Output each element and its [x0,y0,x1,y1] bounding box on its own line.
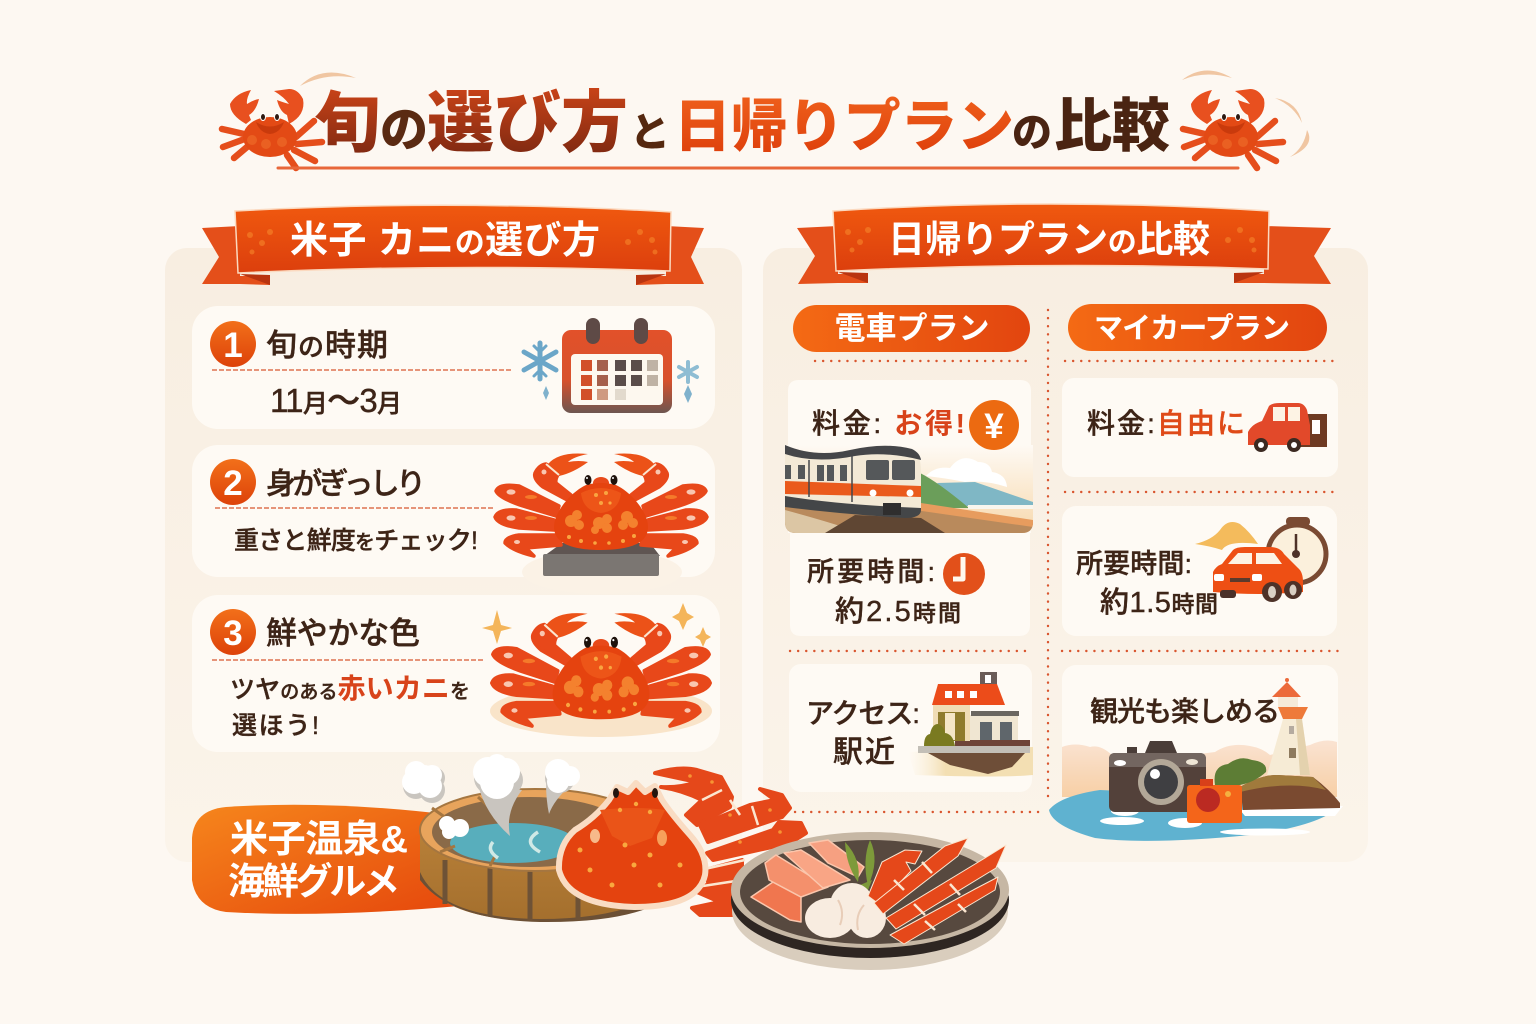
icon: snowflake right [679,362,697,382]
title underline [278,166,1238,170]
title block [222,69,1309,168]
title text: の [1012,100,1052,158]
icon: title crab right [1183,89,1283,168]
icon: crab on scale [495,453,707,556]
heading: vivid colour: 鮮やかな色 [266,616,420,651]
crab body [559,783,705,907]
pill: car plan [1068,304,1327,351]
leaf [845,840,875,905]
red crab text: ツヤのある赤いカニを [230,673,470,704]
sightseeing card [1049,665,1343,841]
number 1 [210,321,256,367]
card 3: colour [192,595,720,752]
title text: 選び方 [427,69,628,166]
title text: と [630,100,670,158]
cloud [1195,522,1258,550]
crab legs on plate [868,838,1006,944]
icon: yen: ¥ [984,407,1004,446]
icon: large crab [559,769,806,915]
pill: car plan: マイカープラン [1094,312,1290,345]
icon: orange car [1213,547,1303,602]
icon: title crab left [222,89,322,168]
time value car: 約1.5時間 [1100,586,1218,619]
card 1: season [192,306,715,429]
time label car: 所要時間: [1076,549,1192,579]
card 2: meat [192,445,715,594]
heading: season: 旬の時期 [266,328,388,363]
crab legs [655,769,806,915]
left ribbon heading [202,205,704,285]
icon: scale [522,543,682,594]
left panel [165,248,742,862]
icon: station house [908,672,1033,776]
number 3 [210,609,256,655]
train [785,445,921,518]
bottom banner [192,805,470,914]
column divider [1047,310,1049,802]
icon: sea [1049,790,1340,841]
number 2: 2 [223,464,243,503]
car fee card [1062,378,1338,477]
access label: アクセス: [806,698,920,729]
scallops [805,883,886,938]
icon: seafood plate [731,832,1009,970]
icon: vivid crab [492,613,710,726]
access value: 駅近 [833,736,895,769]
pill: train plan: 電車プラン [834,311,990,346]
icon: calendar [562,318,672,413]
title text: 旬 [314,70,380,166]
fee text car: 料金:自由に [1087,408,1245,439]
icon: small red camera [1187,779,1242,823]
number 3: 3 [223,614,243,653]
title text: の [380,90,428,160]
icon: stopwatch [1268,517,1326,583]
title text: 日帰りプラン [674,81,1014,163]
platter [490,685,712,737]
bottom banner: 海鮮グルメ [228,861,400,902]
decorative swirls [300,70,1309,157]
car time card [1062,506,1337,636]
right ribbon text: 日帰りプランの比較 [888,219,1210,260]
icon: snowflake left [524,343,556,379]
icon: yen [969,400,1019,450]
crab meat [751,840,864,922]
choose text: 選ほう! [232,712,319,740]
access card [789,664,1033,792]
time label train: 所要時間: [807,557,935,587]
icon: camera [1109,741,1206,812]
icon: lighthouse [1267,678,1310,775]
sunset hills [1062,741,1337,797]
heading: full meat: 身がぎっしり [266,468,426,501]
right panel [763,248,1368,862]
scene: train by the sea [785,445,1033,535]
right ribbon heading [797,204,1331,284]
check text: 重さと鮮度をチェック! [234,527,478,555]
months text: 11月～3月 [270,382,402,419]
sightseeing text: 観光も楽しめる [1090,696,1280,727]
steam [402,754,580,839]
time value train: 約2.5時間 [835,595,961,628]
icon: sparkles [543,385,692,403]
train time card [790,533,1030,636]
icon: island [1215,758,1340,810]
fee text train: 料金: お得! [812,408,965,439]
icon: red clock [943,553,985,595]
number 2 [210,459,256,505]
left ribbon text: 米子 カニの選び方 [290,220,600,262]
icon: gold sparkles [482,603,711,647]
icon: onsen tub [402,754,660,922]
title text [314,69,1170,166]
icon: car with cargo [1248,403,1327,452]
banner text: 米子温泉& [230,819,408,861]
train card [785,380,1033,535]
pill: train plan [793,305,1030,352]
title text: 比較 [1054,79,1170,163]
number 1: 1 [223,326,243,365]
